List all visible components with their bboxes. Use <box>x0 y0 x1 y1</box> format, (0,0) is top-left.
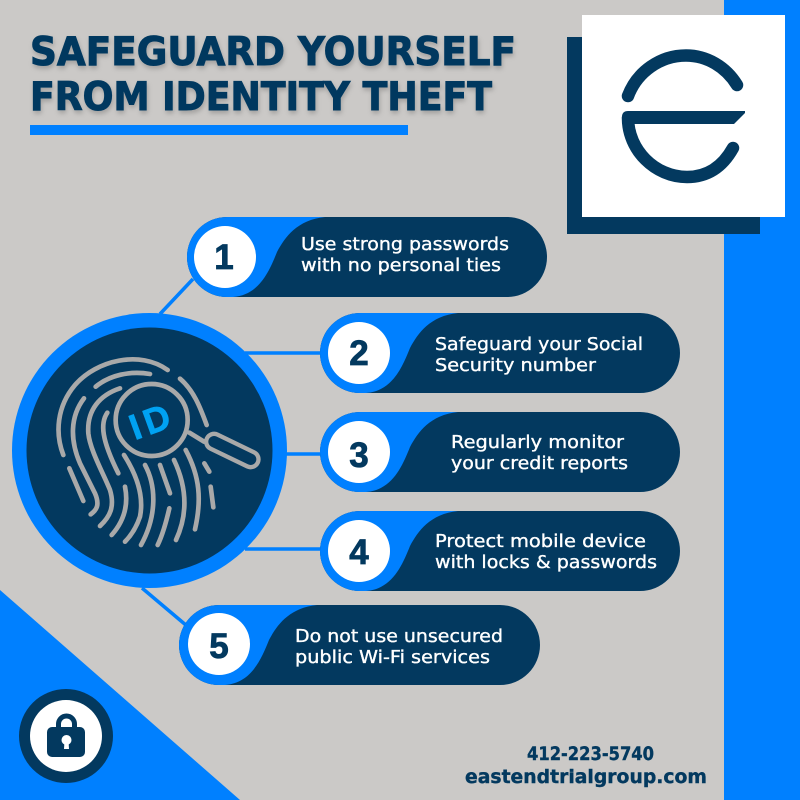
step 5 pill: public Wi-Fi services <box>295 647 490 668</box>
step 4 pill: with locks & passwords <box>435 552 657 573</box>
icon: fingerprint and magnifier <box>59 359 251 545</box>
title underline <box>30 125 408 135</box>
step 4 pill <box>320 511 680 591</box>
step 4 pill: 4 <box>349 533 369 572</box>
step 5 pill: Do not use unsecured <box>295 626 503 647</box>
step 1 pill: Use strong passwords <box>301 234 509 255</box>
step 1 pill: with no personal ties <box>301 255 501 276</box>
bottom left blue triangle <box>0 590 240 800</box>
contact website: eastendtrialgroup.com <box>465 766 707 788</box>
title <box>30 30 516 120</box>
step 3 pill: 3 <box>349 436 369 475</box>
step 1 pill <box>187 217 547 297</box>
step 1 pill: 1 <box>214 238 234 277</box>
step 4 pill: Protect mobile device <box>435 531 646 552</box>
step 2 pill: Security number <box>435 355 597 376</box>
title: SAFEGUARD YOURSELF <box>30 30 516 75</box>
step 3 pill: your credit reports <box>451 453 628 474</box>
step 3 pill: Regularly monitor <box>451 432 625 453</box>
step 3 pill <box>320 412 680 492</box>
central circle with fingerprint icon <box>12 313 287 588</box>
step 2 pill: Safeguard your Social <box>435 334 643 355</box>
logo block <box>567 15 785 234</box>
contact phone number: 412-223-5740 <box>527 743 654 765</box>
connector lines <box>142 279 322 626</box>
icon: fingerprint and magnifier: ID <box>124 394 180 448</box>
icon: padlock badge <box>19 689 113 783</box>
right blue strip <box>724 0 800 800</box>
step 5 pill: 5 <box>209 627 229 666</box>
step 2 pill <box>320 313 680 393</box>
step 5 pill <box>179 605 540 685</box>
title: FROM IDENTITY THEFT <box>30 75 492 120</box>
step 2 pill: 2 <box>349 334 369 373</box>
